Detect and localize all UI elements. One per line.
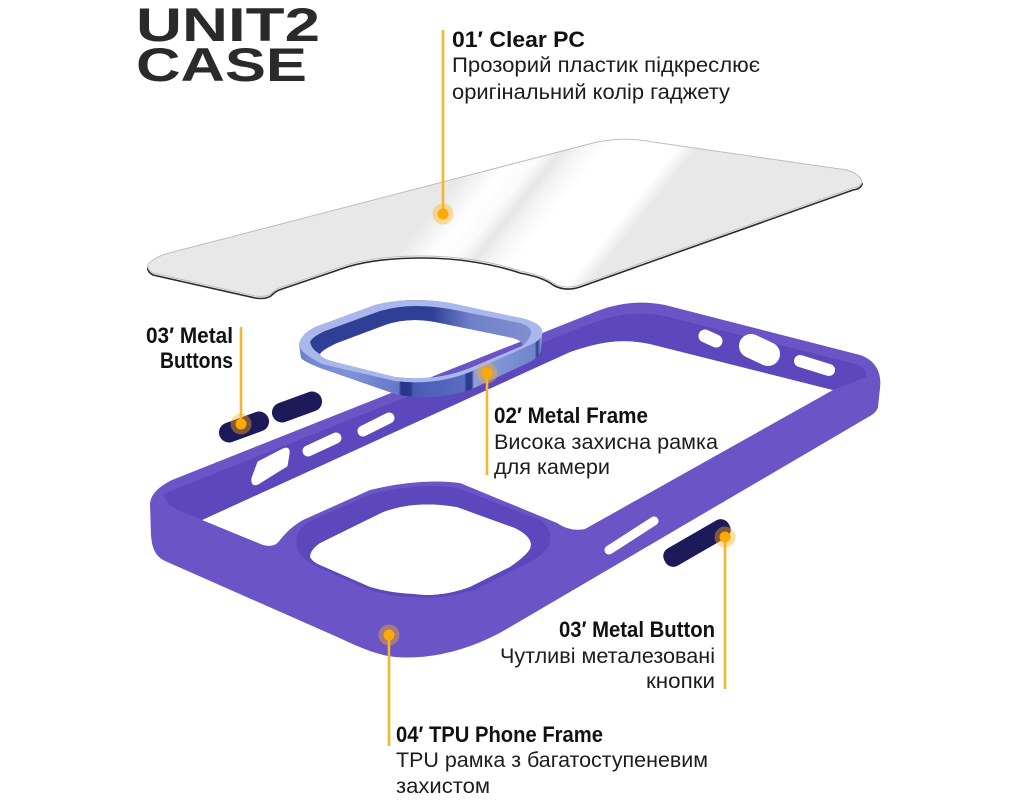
inner wall of frame [163,314,866,520]
logo: UNIT2 case: CASE [136,38,307,91]
callout 04 TPU Phone Frame: 04′ TPU Phone Frame [396,722,603,747]
callout 03 Metal Button: Чутливі металезовані [500,645,715,668]
callout 04 TPU Phone Frame [378,624,708,798]
callout 03 Metal Buttons [146,323,252,434]
callout 01 Clear PC: Прозорий пластик підкреслює [452,54,760,77]
clear PC panel illustration [148,139,862,298]
ring top surface [299,300,542,382]
logo: UNIT2 case [136,0,320,91]
callout 03 Metal Buttons: Buttons [160,348,233,373]
ring side wall [299,300,542,397]
metal buttons pair [216,389,325,445]
callout 03 Metal Button: кнопки [646,670,715,693]
callout 01 Clear PC [432,27,760,224]
callout 02 Metal Frame: Висока захисна рамка [494,431,718,454]
frame body [150,303,880,658]
callout 02 Metal Frame: 02′ Metal Frame [494,403,648,428]
callout 01 Clear PC: 01′ Clear PC [452,27,585,52]
callout 03 Metal Buttons: 03′ Metal [146,323,233,348]
callout 03 Metal Button [500,526,736,693]
callout 02 Metal Frame [476,362,718,479]
callout 04 TPU Phone Frame: захистом [396,775,490,798]
callout 03 Metal Button: 03′ Metal Button [559,617,715,642]
metal camera frame [299,300,542,397]
callout 02 Metal Frame: для камери [494,456,610,479]
callout 01 Clear PC: оригінальний колір гаджету [452,81,731,104]
single metal button [660,516,734,570]
TPU phone frame [150,303,880,658]
callout 04 TPU Phone Frame: TPU рамка з багатоступеневим [396,749,708,772]
ring inner far wall [310,306,531,354]
frame openings [252,336,829,550]
camera island inner wall [296,486,550,598]
